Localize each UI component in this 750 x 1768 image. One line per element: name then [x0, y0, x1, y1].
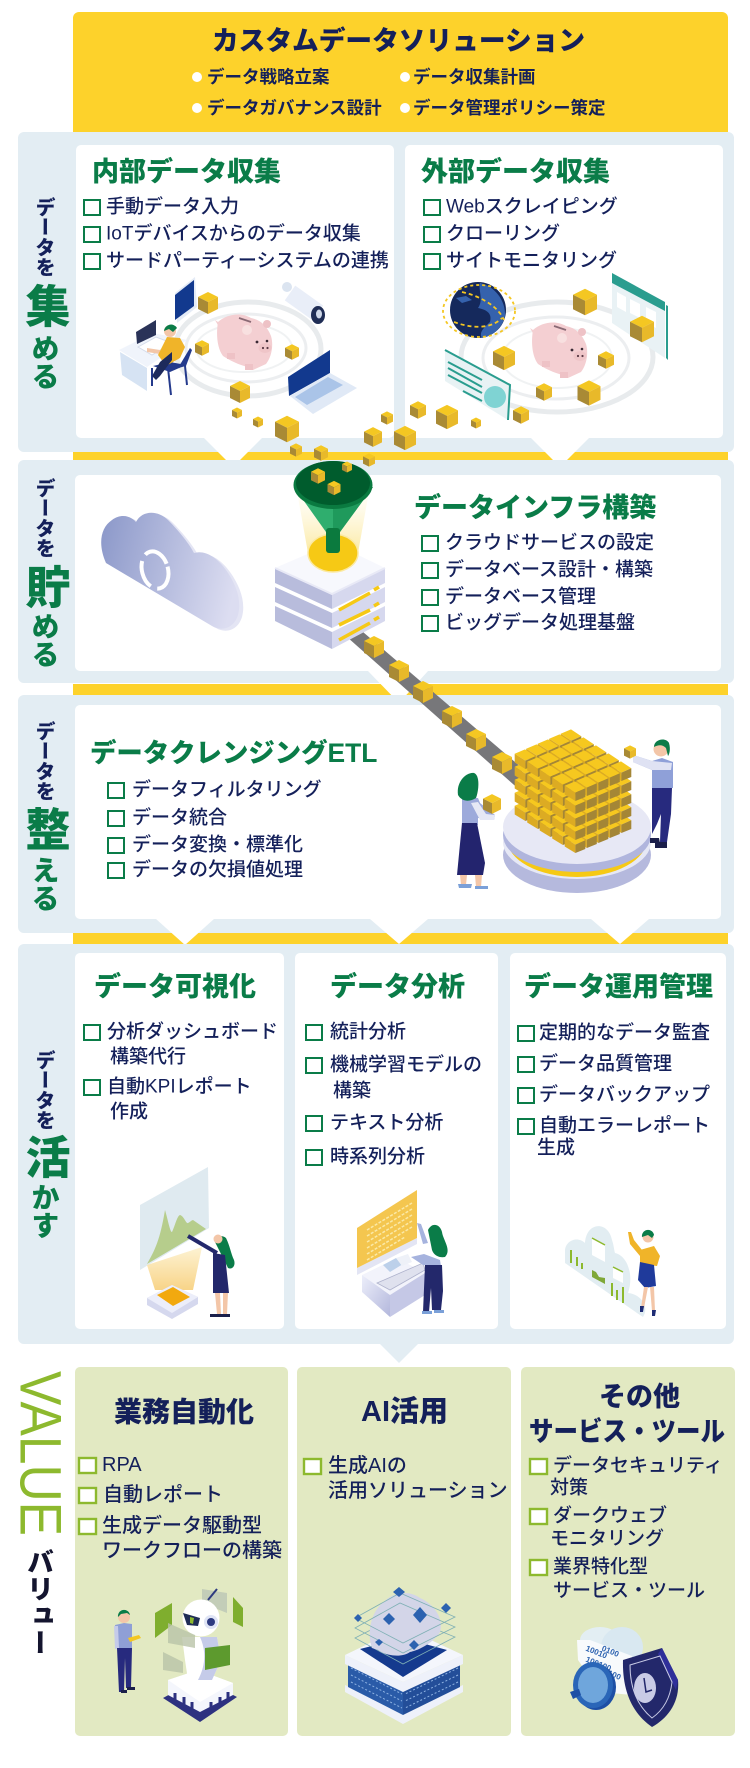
side label: clean	[18, 720, 70, 912]
card: AI use: 活用ソリューション	[328, 1479, 508, 1502]
card: other services and tools: データセキュリティ	[553, 1454, 723, 1476]
text: data cleansing ETL: データ変換・標準化	[132, 832, 303, 856]
side label: use	[18, 1049, 70, 1239]
illustration: presenter with chart	[140, 1167, 235, 1319]
label: value: VALUE	[8, 1371, 72, 1536]
card: other services and tools: サービス・ツール	[553, 1580, 705, 1602]
text: data infrastructure	[414, 492, 656, 634]
text: data cleansing ETL: データ統合	[132, 806, 227, 828]
illustration: internal collection	[119, 277, 357, 414]
list: data strategy items	[192, 67, 606, 118]
list: data strategy items: データ収集計画	[413, 67, 536, 87]
illustration: yellow cube block	[515, 729, 631, 853]
card: internal data collection	[76, 145, 394, 467]
card: business automation: ワークフローの構築	[102, 1539, 282, 1562]
card: other services and tools: ダークウェブ	[553, 1504, 667, 1526]
side label: store: 貯	[18, 564, 70, 609]
text: data infrastructure: データインフラ構築	[414, 492, 656, 523]
text: data infrastructure: ビッグデータ処理基盤	[445, 610, 635, 634]
illustration: security shield and magnifier: 10010	[584, 1644, 609, 1661]
text: data infrastructure: データベース設計・構築	[445, 558, 653, 580]
side label: collect: 集	[18, 283, 70, 328]
side label: use: データを	[32, 1049, 55, 1130]
side label: use: 活	[18, 1134, 70, 1179]
card: internal data collection: サードパーティーシステムの連携	[106, 250, 389, 272]
list: data strategy items: データガバナンス設計	[207, 98, 382, 118]
card: other services and tools: 対策	[550, 1476, 588, 1498]
illustration: woman holding cube	[457, 773, 501, 889]
card: data visualization: 作成	[110, 1100, 148, 1122]
illustration: security shield and magnifier	[570, 1627, 678, 1727]
card: data operations	[510, 953, 726, 1329]
card: internal data collection: 手動データ入力	[106, 194, 239, 218]
side label: clean: える	[28, 856, 60, 912]
card: data operations: 定期的なデータ監査	[539, 1020, 710, 1044]
card: data visualization: 分析ダッシュボード	[107, 1020, 278, 1042]
card: data operations: データ運用管理	[524, 971, 713, 1002]
card: data operations: データ品質管理	[539, 1052, 672, 1074]
panel: use data	[18, 944, 734, 1363]
side label: clean: データを	[32, 720, 55, 801]
card: data analysis: 統計分析	[330, 1020, 406, 1042]
card: external data collection: サイトモニタリング	[446, 250, 617, 272]
card: data analysis	[295, 953, 498, 1329]
card: business automation: 自動レポート	[103, 1483, 223, 1506]
illustration: cloud dashboard	[565, 1226, 660, 1317]
illustration: cube stack platform	[503, 790, 651, 893]
panel: collect data	[18, 132, 734, 467]
label: value: バリュー	[23, 1548, 54, 1656]
side label: collect: データを	[32, 196, 55, 277]
card: data analysis: テキスト分析	[330, 1112, 443, 1134]
illustration: AI brain on chip	[345, 1587, 463, 1724]
card: other services and tools	[521, 1367, 735, 1736]
panel: store data	[18, 460, 734, 703]
card: other services and tools: サービス・ツール	[529, 1416, 725, 1447]
card: other services and tools: モニタリング	[550, 1528, 664, 1550]
text: data cleansing ETL: データクレンジングETL	[90, 738, 377, 768]
card: external data collection: Webスクレイピング	[446, 196, 618, 218]
card: AI use	[297, 1367, 511, 1736]
side label: collect	[18, 196, 70, 390]
side label: store	[18, 477, 70, 668]
text: data infrastructure: データベース管理	[445, 584, 596, 608]
illustration: security shield and magnifier: 0100	[602, 1667, 623, 1682]
card: other services and tools: 業界特化型	[553, 1556, 648, 1578]
card: data visualization: 構築代行	[110, 1046, 186, 1068]
section backgrounds and connecting bands	[73, 452, 728, 944]
side label: use: かす	[28, 1183, 60, 1239]
card: external data collection	[405, 145, 723, 467]
card: data operations: データバックアップ	[539, 1082, 710, 1106]
card: external data collection: クローリング	[446, 222, 560, 244]
card: AI use: 生成AIの	[328, 1454, 407, 1477]
card: internal data collection: 内部データ収集	[92, 156, 281, 187]
card: internal data collection: IoTデバイスからのデータ収集	[106, 222, 361, 244]
illustration: falling data cubes	[232, 401, 529, 467]
icon: funnel over server	[275, 461, 385, 649]
text: data cleansing ETL: データフィルタリング	[132, 778, 322, 800]
text: data cleansing ETL: データの欠損値処理	[132, 858, 303, 880]
illustration: external collection	[443, 273, 668, 420]
card: business automation: RPA	[102, 1454, 142, 1476]
card: business automation	[75, 1367, 288, 1736]
panel: custom data solution header	[73, 12, 728, 132]
text: data infrastructure: クラウドサービスの設定	[445, 532, 654, 554]
card: business automation: 生成データ駆動型	[102, 1513, 262, 1537]
label: value	[8, 1371, 72, 1656]
icon: cloud	[101, 513, 243, 631]
card: data visualization: データ可視化	[94, 971, 256, 1002]
card: data analysis: 時系列分析	[330, 1146, 425, 1168]
card: data visualization	[75, 953, 284, 1329]
panel: clean data	[18, 695, 734, 945]
card: data analysis: 構築	[333, 1080, 371, 1102]
card: data visualization: 自動KPIレポート	[107, 1076, 252, 1098]
card: data analysis: データ分析	[330, 971, 465, 1002]
card: business automation: 業務自動化	[114, 1396, 254, 1428]
side label: collect: める	[28, 334, 60, 390]
side label: store: める	[28, 612, 60, 668]
card: other services and tools: その他	[599, 1382, 680, 1412]
illustration: security shield and magnifier: 0100	[600, 1644, 621, 1659]
title: カスタムデータソリューション	[212, 26, 585, 56]
conveyor belt with cubes	[347, 632, 522, 792]
text: data cleansing ETL	[90, 738, 377, 880]
illustration: robot with person	[114, 1589, 243, 1722]
illustration: man holding cube	[624, 740, 673, 848]
illustration: security shield and magnifier: 100100	[584, 1655, 613, 1673]
side label: store: データを	[32, 477, 55, 558]
illustration: analyst at workstation	[357, 1190, 448, 1317]
card: data operations: 生成	[537, 1136, 575, 1158]
card: data operations: 自動エラーレポート	[539, 1114, 710, 1136]
card: external data collection: 外部データ収集	[421, 156, 610, 187]
list: data strategy items: データ管理ポリシー策定	[413, 98, 606, 118]
list: data strategy items: データ戦略立案	[207, 67, 330, 87]
side label: clean: 整	[18, 806, 70, 851]
card: AI use: AI活用	[361, 1395, 448, 1428]
card: data analysis: 機械学習モデルの	[330, 1052, 482, 1076]
